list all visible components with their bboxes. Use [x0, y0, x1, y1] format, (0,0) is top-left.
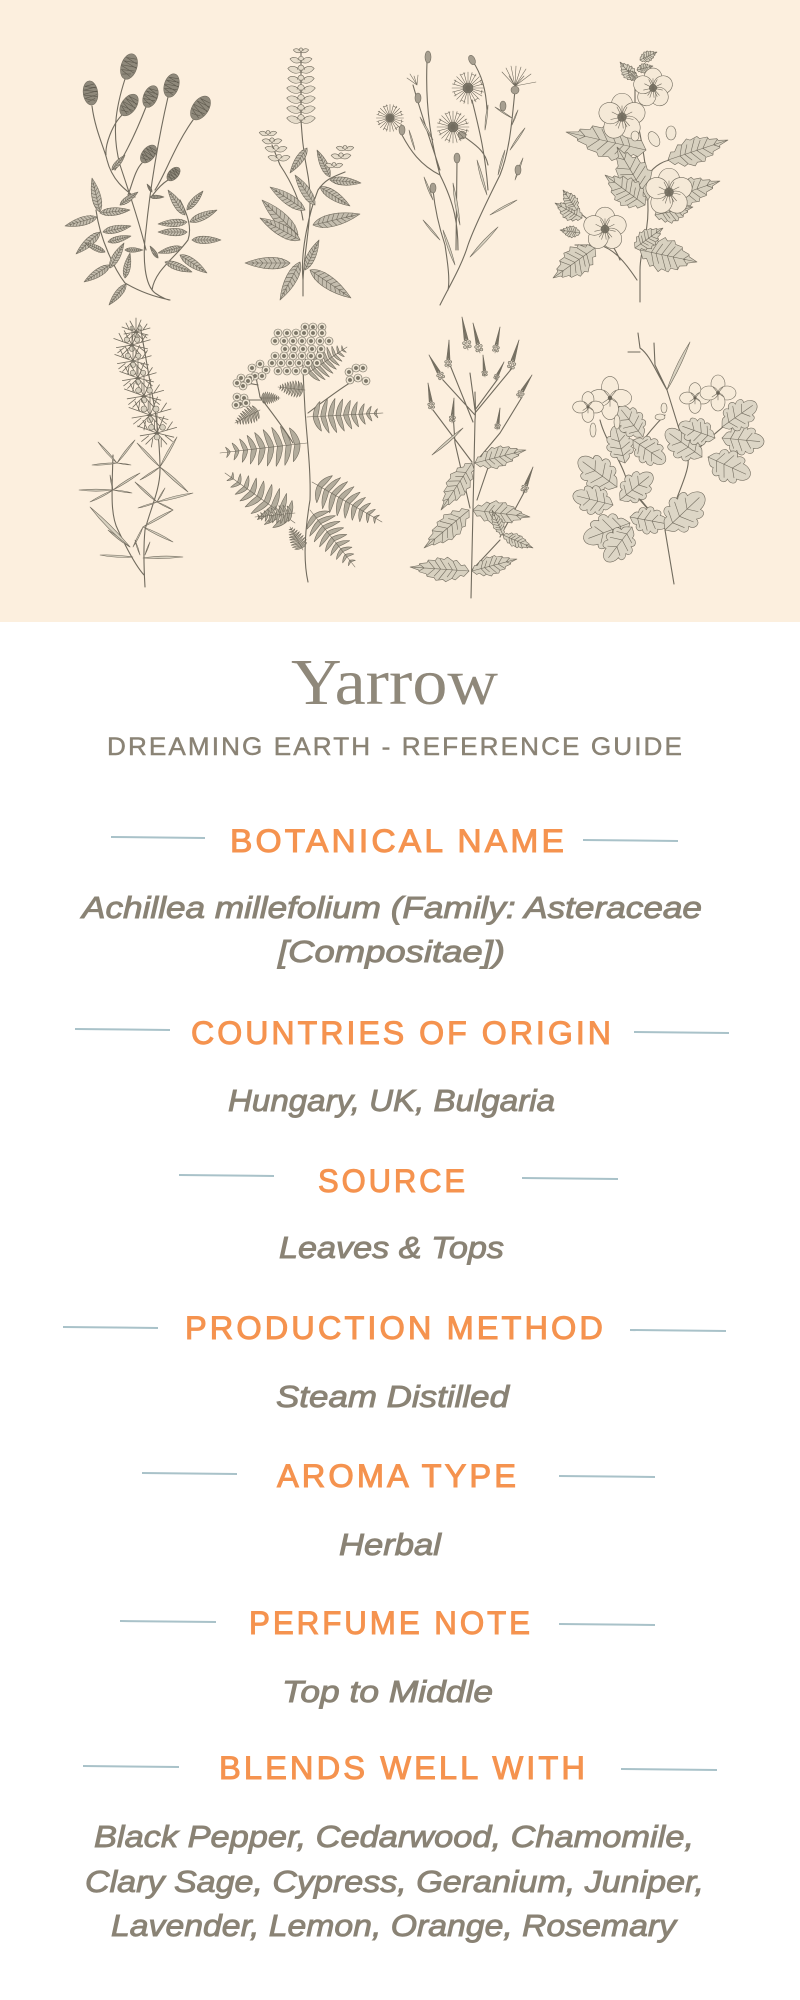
subtitle: DREAMING EARTH - REFERENCE GUIDE: [107, 733, 684, 761]
heading: blends well with: BLENDS WELL WITH: [219, 1750, 588, 1786]
plant: vervain: [409, 316, 536, 598]
panel: botanical illustrations: [0, 0, 800, 622]
plant: greater celandine: [569, 333, 765, 584]
text: blends value: [85, 1820, 704, 1943]
plant: hyssop: [79, 318, 193, 587]
text: botanical name value: Achillea millefolium (Family: Asteraceae: [80, 891, 702, 925]
text: botanical name value: [Compositae]): [277, 935, 505, 969]
plant: tansy-leaf yarrow: [214, 323, 391, 582]
heading: source: SOURCE: [318, 1163, 468, 1199]
section: source: [179, 1163, 618, 1265]
text: production value: Steam Distilled: [276, 1380, 510, 1414]
text: aroma value: Herbal: [339, 1528, 442, 1562]
heading: aroma type: AROMA TYPE: [277, 1458, 519, 1494]
heading: production method: PRODUCTION METHOD: [185, 1310, 606, 1346]
title: Yarrow: [291, 646, 498, 719]
section: aroma type: [142, 1458, 655, 1562]
text: blends value: Lavender, Lemon, Orange, Rosemary: [111, 1909, 678, 1943]
section: production method: [63, 1310, 726, 1414]
text: blends value: Clary Sage, Cypress, Geranium, Juniper,: [85, 1865, 704, 1899]
text: countries value: Hungary, UK, Bulgaria: [228, 1084, 555, 1118]
plant: clary sage spike: [245, 48, 361, 303]
text: botanical name value: [80, 891, 702, 969]
heading: perfume note: PERFUME NOTE: [249, 1605, 533, 1641]
text: source value: Leaves & Tops: [279, 1231, 504, 1265]
section: countries of origin: [75, 1015, 729, 1118]
section: perfume note: [120, 1605, 655, 1709]
plant: cornflower: [376, 51, 536, 305]
plant: burnet with dark flower heads: [64, 52, 221, 307]
section: botanical name: [80, 823, 702, 969]
heading: botanical name: BOTANICAL NAME: [230, 823, 567, 859]
heading: countries of origin: COUNTRIES OF ORIGIN: [191, 1015, 614, 1051]
plant: marshmallow: [544, 47, 732, 302]
text: perfume value: Top to Middle: [282, 1675, 493, 1709]
section: blends well with: [83, 1750, 717, 1943]
text: blends value: Black Pepper, Cedarwood, Chamomile,: [94, 1820, 694, 1854]
